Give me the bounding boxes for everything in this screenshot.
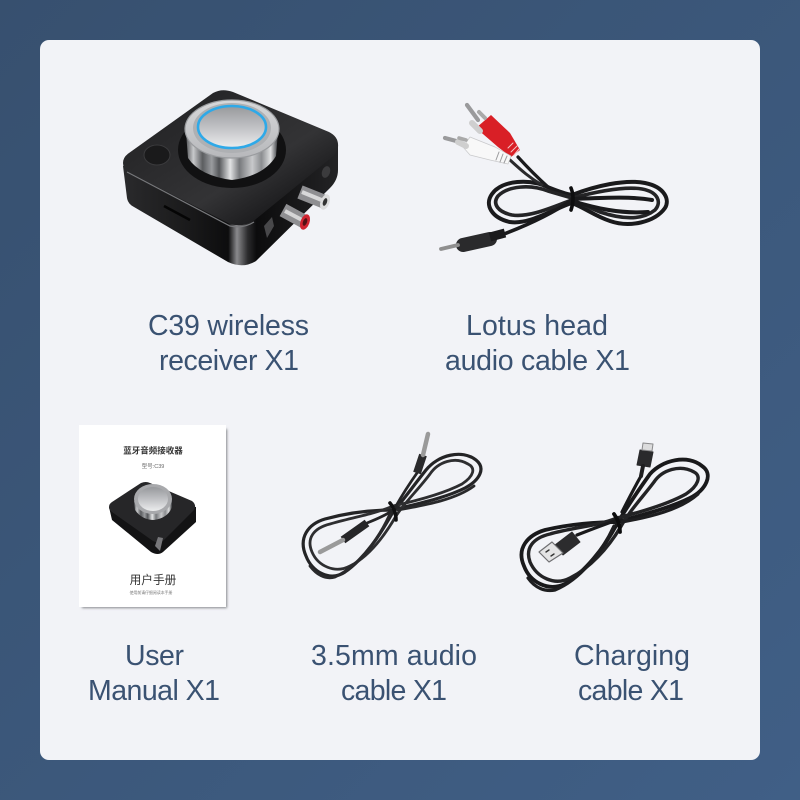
manual device photo [109,482,196,554]
icon: C39 wireless receiver [123,90,338,265]
USB-A plug [539,532,580,562]
icon: 3.5mm audio cable [303,434,481,578]
manual note: 使用前请仔细阅读本手册 [130,590,173,595]
white plug [445,137,511,164]
manual title: 蓝牙音频接收器 [123,446,183,456]
caption: Lotus head audio cable: Lotus head [466,310,608,342]
manual model: 型号:C39 [142,462,164,470]
manual subtitle: 用户手册 [130,573,177,587]
caption: Charging cable: cable X1 [578,675,684,707]
caption: C39 wireless receiver: C39 wireless [148,310,309,342]
icon: lotus head audio cable [441,105,667,249]
caption: 3.5mm audio cable: 3.5mm audio [311,640,477,672]
caption: Lotus head audio cable: audio cable X1 [445,345,630,377]
icon: charging cable [521,443,708,590]
red plug [467,105,520,157]
caption: Charging cable: Charging [574,640,690,672]
icon: user manual [79,425,227,608]
caption: User Manual: Manual X1 [88,675,220,707]
bottom jack [320,523,367,552]
caption: User Manual: User [125,640,184,672]
caption: C39 wireless receiver: receiver X1 [159,345,299,377]
3.5mm plug [441,233,505,249]
caption: 3.5mm audio cable: cable X1 [341,675,447,707]
USB-C plug [637,443,653,476]
top jack [417,434,428,473]
